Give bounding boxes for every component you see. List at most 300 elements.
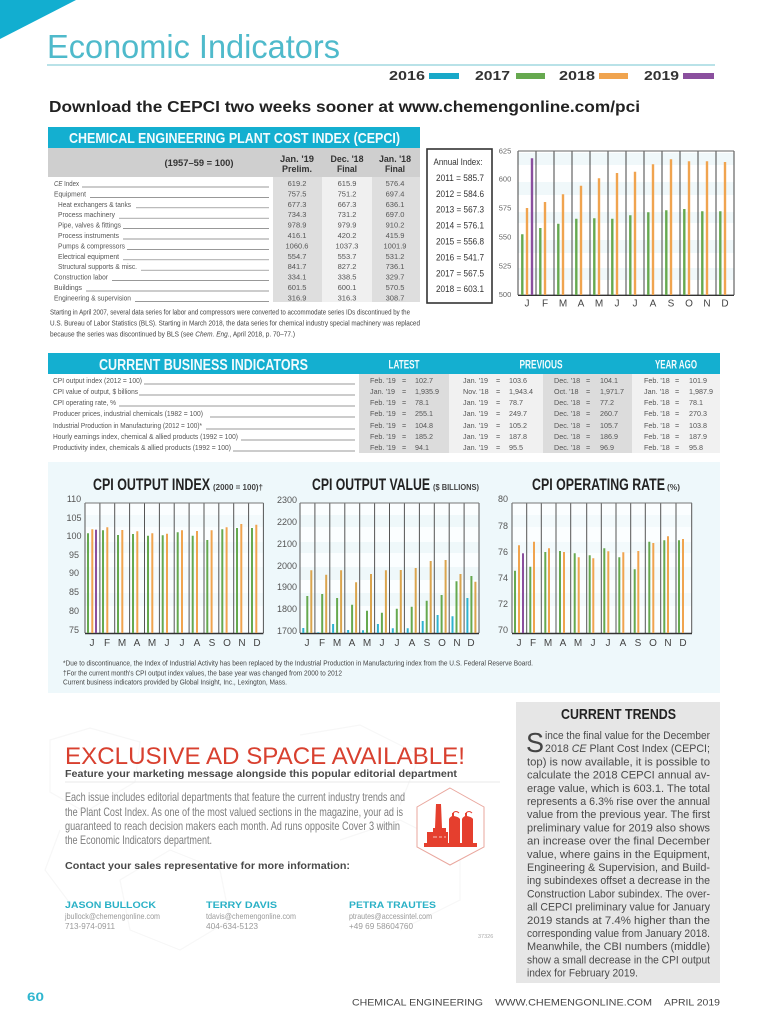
month labels: J (632, 298, 638, 310)
trends body: ince the final value for the December (545, 730, 710, 742)
CBI previous column 1: Jan. '19 (463, 421, 488, 430)
CBI previous column 2: Dec. '18 (554, 398, 580, 407)
bars: 2017 (522, 209, 720, 295)
month labels: M (363, 638, 371, 649)
CBI year ago column: 270.3 (689, 409, 707, 418)
month labels: J (304, 638, 310, 649)
table values: 576.4 (386, 179, 404, 188)
y axis labels: 1900 (277, 582, 297, 592)
CBI previous column 2: = (586, 409, 590, 418)
trends body: 2019 stands at 7.4% higher than the (527, 915, 710, 927)
CBI row labels: Producer prices, industrial chemicals (1982 = 100) (53, 409, 203, 418)
y axis labels: 95 (69, 550, 79, 560)
table values: 757.5 (288, 189, 306, 198)
y axis labels: 74 (498, 573, 508, 583)
table row labels: CE Index (54, 179, 79, 188)
table values: 415.9 (386, 231, 404, 240)
ad body text (65, 790, 405, 847)
month labels: S (424, 638, 431, 649)
month labels: S (635, 638, 642, 649)
table values: 416.1 (288, 231, 306, 240)
CBI previous column 1: 78.7 (509, 398, 523, 407)
y axis labels: 110 (67, 494, 81, 504)
CBI year ago column: = (675, 443, 679, 452)
CBI latest column: = (402, 409, 406, 418)
table values: 667.3 (338, 200, 356, 209)
y axis labels: 575 (499, 204, 511, 212)
contact: Petra Trautes: PETRA TRAUTES (349, 900, 436, 911)
table values: 316.3 (338, 293, 356, 302)
y axis labels: 80 (69, 606, 79, 616)
y axis labels: 100 (66, 531, 82, 541)
footer: CHEMICAL ENGINEERING (352, 998, 483, 1008)
table row labels: Equipment (54, 189, 87, 198)
table row labels: Pipe, valves & fittings (58, 221, 121, 230)
ad contact prompt: Contact your sales representative for more information: (65, 861, 350, 872)
bars: 2018 (92, 524, 256, 633)
trends body: Engineering & Supervision, and Build- (527, 862, 710, 874)
y axis labels: 2100 (277, 539, 297, 549)
table values: 736.1 (386, 262, 404, 271)
CBI headings: YEAR AGO (655, 360, 697, 372)
table values: 751.2 (338, 189, 356, 198)
month labels: A (578, 298, 585, 310)
annual index box: 2015 = 556.8 (436, 236, 484, 248)
month labels: M (148, 638, 156, 649)
CEPCI footnote: because the series was discontinued by BLS (see Chem. Eng., April 2018, p. 70–77.) (50, 332, 295, 338)
trends body: top) is now available, it is possible to (527, 756, 710, 768)
trends body: all CEPCI preliminary value for January (527, 902, 710, 914)
column headers: Final (385, 164, 405, 175)
table values: 615.9 (338, 179, 356, 188)
y axis labels: 78 (498, 521, 508, 531)
month labels: M (333, 638, 341, 649)
month labels: O (438, 638, 446, 649)
y axis labels: 2200 (277, 517, 297, 527)
contact: Jason Bullock: 713-974-0911 (65, 921, 115, 931)
CBI previous column 1: = (496, 432, 500, 441)
bars: 2019 (531, 158, 533, 295)
icon: factory in hexagon (417, 788, 484, 865)
CBI year ago column: 103.8 (689, 421, 707, 430)
CBI latest column (370, 376, 439, 452)
CBI previous column 2: 260.7 (600, 409, 618, 418)
CBI year ago column: = (675, 432, 679, 441)
contact: Terry Davis: tdavis@chemengonline.com (206, 911, 296, 921)
table values: 619.2 (288, 179, 306, 188)
CEPCI footnote (50, 310, 420, 338)
CBI previous column 2: = (586, 387, 590, 396)
legend: years (389, 69, 714, 83)
trends body: ing subindexes offset a decrease in the (527, 875, 710, 887)
column headers (164, 154, 411, 175)
month labels: A (620, 638, 627, 649)
y axis labels: 600 (499, 174, 511, 184)
month labels: J (614, 298, 620, 310)
CBI row labels: CPI output index (2012 = 100) (53, 376, 142, 385)
CBI year ago column: = (675, 421, 679, 430)
bars: 2017 (307, 576, 471, 633)
trends body: represents a 6.3% rise over the annual (527, 796, 710, 808)
CBI previous column 1: Nov. '18 (463, 387, 489, 396)
trends body: show a small decrease in the CPI output (527, 954, 710, 966)
contact: Petra Trautes (349, 900, 436, 931)
table row labels: Process machinery (58, 210, 115, 219)
legend: years: 2016 (389, 69, 425, 83)
legend: years: 2019 (644, 69, 679, 83)
bars: 2016 (303, 598, 467, 633)
month labels: F (319, 638, 325, 649)
month labels: D (467, 638, 475, 649)
CBI previous column 1: 105.2 (509, 421, 527, 430)
CBI year ago column: 1,987.9 (689, 387, 713, 396)
bars: 2019 (522, 553, 524, 633)
y axis labels: 1800 (277, 604, 297, 614)
table values: 338.5 (338, 273, 356, 282)
y axis labels (66, 494, 82, 635)
CBI previous column 2: 96.9 (600, 443, 614, 452)
table values: 677.3 (288, 200, 306, 209)
CBI previous column 2: 104.1 (600, 376, 618, 385)
trends body (527, 730, 710, 980)
CBI latest column: 94.1 (415, 443, 429, 452)
table values: 1001.9 (384, 241, 406, 250)
y axis labels: 76 (498, 547, 508, 557)
bars: 2019 (95, 530, 97, 633)
table values: 841.7 (288, 262, 306, 271)
month labels: J (590, 638, 596, 649)
table values: 601.5 (288, 283, 306, 292)
annual index box: 2011 = 585.7 (436, 173, 484, 184)
CBI previous column 2: 77.2 (600, 398, 614, 407)
table row labels: Electrical equipment (58, 252, 120, 261)
month labels: D (721, 298, 729, 310)
CBI previous column 2: 186.9 (600, 432, 618, 441)
CBI row labels: CPI operating rate, % (53, 398, 117, 407)
CBI year ago column: Jan. '18 (644, 387, 669, 396)
y axis labels: 2300 (277, 495, 297, 505)
CBI previous column 2 (554, 376, 624, 452)
month labels: A (650, 298, 657, 310)
trends body: calculate the 2018 CEPCI annual av- (527, 770, 710, 782)
trends body: an increase over the final December (527, 836, 710, 848)
bars: 2018 (527, 159, 725, 295)
table values: 554.7 (288, 252, 306, 261)
CBI headings (99, 357, 697, 374)
CBI previous column 2: = (586, 443, 590, 452)
ad body text: the Plant Cost Index. As one of the most valued sections in the magazine, your ad is (65, 805, 403, 819)
contact: Petra Trautes: ptrautes@accessintel.com (349, 911, 432, 921)
CBI previous column 2: = (586, 398, 590, 407)
y axis labels: 80 (498, 494, 508, 504)
CBI row labels (53, 376, 355, 452)
month labels: J (164, 638, 170, 649)
table row labels (54, 179, 269, 302)
CBI latest column: Feb. '19 (370, 421, 396, 430)
trends body: 2018 CE Plant Cost Index (CEPCI; (545, 743, 710, 755)
chart heading: CPI OUTPUT VALUE (312, 475, 430, 494)
CBI latest column: 185.2 (415, 432, 433, 441)
month labels (304, 638, 475, 649)
table values: 697.4 (386, 189, 404, 198)
ad code: 37326 (478, 934, 493, 940)
month labels (90, 638, 261, 649)
CBI year ago column: = (675, 387, 679, 396)
trends body: Meanwhile, the CBI numbers (middle) (527, 941, 710, 953)
table values: 329.7 (386, 273, 404, 282)
bars: 2017 (515, 540, 679, 633)
ad body text: the Economic Indicators department. (65, 833, 212, 847)
y axis labels: 72 (498, 599, 508, 609)
month labels: O (685, 298, 693, 310)
table values: 734.3 (288, 210, 306, 219)
ad subheading: Feature your marketing message alongside this popular editorial department (65, 769, 458, 780)
y axis labels: 550 (499, 232, 511, 242)
CBI latest column: 78.1 (415, 398, 429, 407)
chart heading: (2000 = 100)† (213, 482, 263, 492)
table values: 420.2 (338, 231, 356, 240)
CEPCI footnote: Starting in April 2007, several data series for labor and compressors were converted to accommodate series IDs discontinued by the (50, 310, 410, 316)
chart heading: CPI OUTPUT INDEX (93, 475, 210, 494)
contact: Terry Davis: TERRY DAVIS (206, 900, 277, 911)
table row labels: Process instruments (58, 231, 119, 240)
CBI headings: CURRENT BUSINESS INDICATORS (99, 357, 308, 374)
table values: 308.7 (386, 293, 404, 302)
month labels: N (453, 638, 461, 649)
CBI latest column: Feb. '19 (370, 409, 396, 418)
month labels: O (223, 638, 231, 649)
column headers: (1957–59 = 100) (164, 158, 234, 169)
y axis labels: 105 (66, 513, 82, 523)
CBI previous column 1: = (496, 398, 500, 407)
table values: 316.9 (288, 293, 306, 302)
month labels: N (703, 298, 711, 310)
CBI headings: PREVIOUS (520, 360, 563, 372)
column headers: Final (337, 164, 357, 175)
CBI previous column 2: Oct. '18 (554, 387, 579, 396)
corner triangle (0, 0, 76, 39)
month labels: J (380, 638, 384, 649)
annual index box: 2012 = 584.6 (436, 189, 484, 200)
y axis labels: 90 (69, 568, 79, 578)
CBI year ago column: Feb. '18 (644, 421, 670, 430)
trends body: erage value, which is 603.1. The total (527, 783, 710, 795)
CBI latest column: 1,935.9 (415, 387, 439, 396)
table row labels: Structural supports & misc. (58, 262, 137, 271)
CPI chart footnotes: †For the current month's CPI output index values, the base year was changed from 2000 to 2012 (63, 670, 342, 678)
y axis labels: 2000 (277, 561, 297, 571)
month labels: J (606, 638, 610, 649)
trends body: index for February 2019. (527, 968, 638, 980)
CBI previous column 1: 249.7 (509, 409, 527, 418)
CBI previous column 1 (463, 376, 533, 452)
month labels: J (180, 638, 184, 649)
table values: 334.1 (288, 273, 306, 282)
month labels: A (134, 638, 141, 649)
table row labels: Construction labor (54, 273, 108, 282)
CBI latest column: Feb. '19 (370, 432, 396, 441)
CBI year ago column: 95.8 (689, 443, 703, 452)
y axis labels: 500 (499, 290, 511, 299)
month labels: S (209, 638, 216, 649)
CBI latest column: = (402, 443, 406, 452)
CBI year ago column (644, 376, 713, 452)
CBI previous column 2: 1,971.7 (600, 387, 624, 396)
CBI previous column 1: = (496, 376, 500, 385)
y axis labels (499, 146, 511, 299)
ad body text: Each issue includes editorial departments that feature the current industry trends and (65, 790, 405, 804)
month labels: M (595, 298, 603, 310)
table values: 570.5 (386, 283, 404, 292)
CBI year ago column: Feb. '18 (644, 376, 670, 385)
CBI previous column 1: Jan. '19 (463, 432, 488, 441)
CBI previous column 1: = (496, 409, 500, 418)
panel: current business indicators (48, 353, 720, 453)
CBI previous column 2: Dec. '18 (554, 409, 580, 418)
y axis labels: 1700 (277, 626, 297, 636)
trends body: preliminary value for 2019 also shows (527, 822, 710, 834)
panel: advertisement (45, 725, 500, 950)
table values: 910.2 (386, 221, 404, 230)
contact: Jason Bullock (64, 900, 160, 931)
CBI previous column 2: = (586, 421, 590, 430)
y axis labels: 70 (498, 625, 508, 635)
CBI previous column 1: = (496, 421, 500, 430)
month labels: J (394, 638, 400, 649)
CBI year ago column: = (675, 398, 679, 407)
month labels: N (238, 638, 246, 649)
CBI previous column 2: = (586, 432, 590, 441)
month labels: D (679, 638, 687, 649)
y axis labels: 525 (499, 262, 511, 270)
CBI previous column 1: Jan. '19 (463, 409, 488, 418)
CBI latest column: = (402, 376, 406, 385)
CPI chart footnotes: Current business indicators provided by Global Insight, Inc., Lexington, Mass. (63, 680, 287, 686)
table row labels: Heat exchangers & tanks (58, 200, 131, 209)
month labels: J (90, 638, 94, 649)
table values: 978.9 (288, 221, 306, 230)
panel: CEPCI table (48, 127, 420, 302)
month labels: D (253, 638, 261, 649)
footer (352, 998, 720, 1008)
CBI year ago column: Feb. '18 (644, 398, 670, 407)
CBI latest column: 104.8 (415, 421, 433, 430)
CBI previous column 1: = (496, 443, 500, 452)
column headers: Jan. '18 (379, 154, 411, 165)
legend: years: 2018 (559, 69, 595, 83)
CBI latest column: 102.7 (415, 376, 433, 385)
month labels: A (409, 638, 416, 649)
month labels: M (544, 638, 552, 649)
y axis labels (277, 495, 297, 636)
table row labels: Engineering & supervision (54, 293, 131, 302)
month labels: J (516, 638, 522, 649)
CBI year ago column: = (675, 376, 679, 385)
annual index box: 2013 = 567.3 (436, 204, 484, 216)
month labels: F (104, 638, 110, 649)
CBI latest column: = (402, 387, 406, 396)
CBI latest column: 255.1 (415, 409, 433, 418)
CBI latest column: = (402, 421, 406, 430)
annual index box: 2018 = 603.1 (436, 284, 484, 295)
CBI previous column 2: Dec. '18 (554, 432, 580, 441)
table values: 553.7 (338, 252, 356, 261)
CBI latest column: = (402, 432, 406, 441)
y axis labels: 75 (69, 625, 79, 635)
title: Economic Indicators (47, 28, 340, 65)
CBI previous column 1: 95.5 (509, 443, 523, 452)
month labels: A (560, 638, 567, 649)
trends body: Construction Labor subindex. The over- (527, 888, 710, 900)
CBI year ago column: Feb. '18 (644, 443, 670, 452)
CBI latest column: Feb. '19 (370, 443, 396, 452)
CPI chart footnotes: *Due to discontinuance, the Index of Industrial Activity has been replaced by the Industrial Production in Manufacturing index from the U.S. Federal Reserve Board. (63, 660, 533, 668)
bars: 2018 (519, 536, 683, 633)
contact: Terry Davis (206, 900, 296, 931)
month labels: F (530, 638, 536, 649)
month labels (516, 638, 687, 649)
annual index box: Annual Index: (434, 157, 482, 168)
contact: Jason Bullock: JASON BULLOCK (65, 900, 156, 911)
CBI latest column: = (402, 398, 406, 407)
chart: CPI operating rate (498, 475, 692, 649)
table values: 1037.3 (336, 241, 358, 250)
table heading: CHEMICAL ENGINEERING PLANT COST INDEX (CEPCI) (69, 130, 400, 147)
y axis labels: 85 (69, 587, 79, 597)
CBI row labels: Productivity index, chemicals & allied products (1992 = 100) (53, 443, 231, 452)
CBI year ago column: 101.9 (689, 376, 707, 385)
table values: 731.2 (338, 210, 356, 219)
month labels: J (524, 298, 530, 310)
CBI previous column 1: 187.8 (509, 432, 527, 441)
CBI year ago column: 78.1 (689, 398, 703, 407)
month labels: A (194, 638, 201, 649)
trends body: corresponding value from January 2018. (527, 928, 710, 940)
table values (286, 179, 406, 302)
month labels: S (668, 298, 675, 310)
CBI previous column 1: Jan. '19 (463, 443, 488, 452)
contact: Terry Davis: 404-634-5123 (206, 921, 258, 931)
trends heading: CURRENT TRENDS (561, 706, 676, 723)
annual index box (427, 149, 492, 303)
CBI previous column 2: 105.7 (600, 421, 618, 430)
annual index box: 2016 = 541.7 (436, 252, 484, 264)
table values: 636.1 (386, 200, 404, 209)
month labels (524, 298, 729, 310)
CBI previous column 1: 103.6 (509, 376, 527, 385)
CBI previous column 1: Jan. '19 (463, 398, 488, 407)
download notice: Download the CEPCI two weeks sooner at www.chemengonline.com/pci (49, 99, 640, 116)
CBI year ago column: Feb. '18 (644, 409, 670, 418)
CBI row labels: Hourly earnings index, chemical & allied products (1992 = 100) (53, 432, 238, 441)
contact: Petra Trautes: +49 69 58604760 (349, 921, 413, 931)
CBI row labels: Industrial Production in Manufacturing (2012 = 100)* (53, 421, 202, 430)
drop cap: S (526, 727, 544, 758)
CBI previous column 2: Dec. '18 (554, 443, 580, 452)
table values: 1060.6 (286, 241, 308, 250)
panel: current trends (516, 702, 720, 983)
bars: 2018 (311, 560, 475, 633)
CBI latest column: Feb. '19 (370, 398, 396, 407)
y axis labels: 625 (499, 146, 511, 156)
CBI latest column: Feb. '19 (370, 376, 396, 385)
trends body: value, where gains in the Equipment, (527, 849, 710, 861)
page number: 60 (27, 992, 44, 1004)
column headers: Dec. '18 (330, 154, 364, 165)
CBI previous column 2: = (586, 376, 590, 385)
month labels: M (574, 638, 582, 649)
month labels: A (349, 638, 356, 649)
